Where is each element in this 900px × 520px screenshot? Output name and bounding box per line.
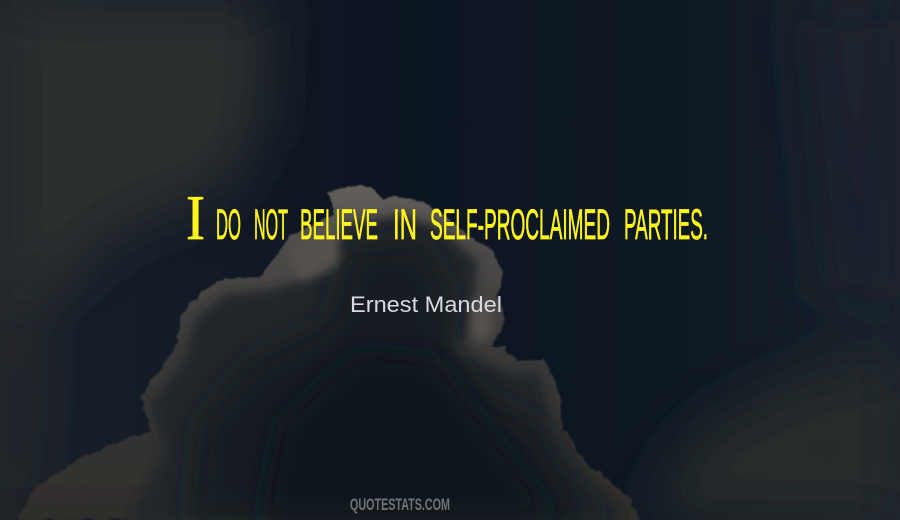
author name: Ernest Mandel [350,292,502,317]
source watermark: QUOTESTATS.COM [350,496,450,514]
large initial I: I [186,182,205,253]
cloud silhouette with bright rim [17,187,640,520]
quote text: BELIEVE [300,202,378,249]
cloud highlights [290,222,495,340]
quote text: DO [216,202,241,249]
quote text: PARTIES. [624,202,708,249]
quote text: NOT [254,202,288,249]
quote text: IN [393,202,417,249]
quote text: SELF-PROCLAIMED [430,202,610,249]
cloud dark interior [130,215,625,520]
